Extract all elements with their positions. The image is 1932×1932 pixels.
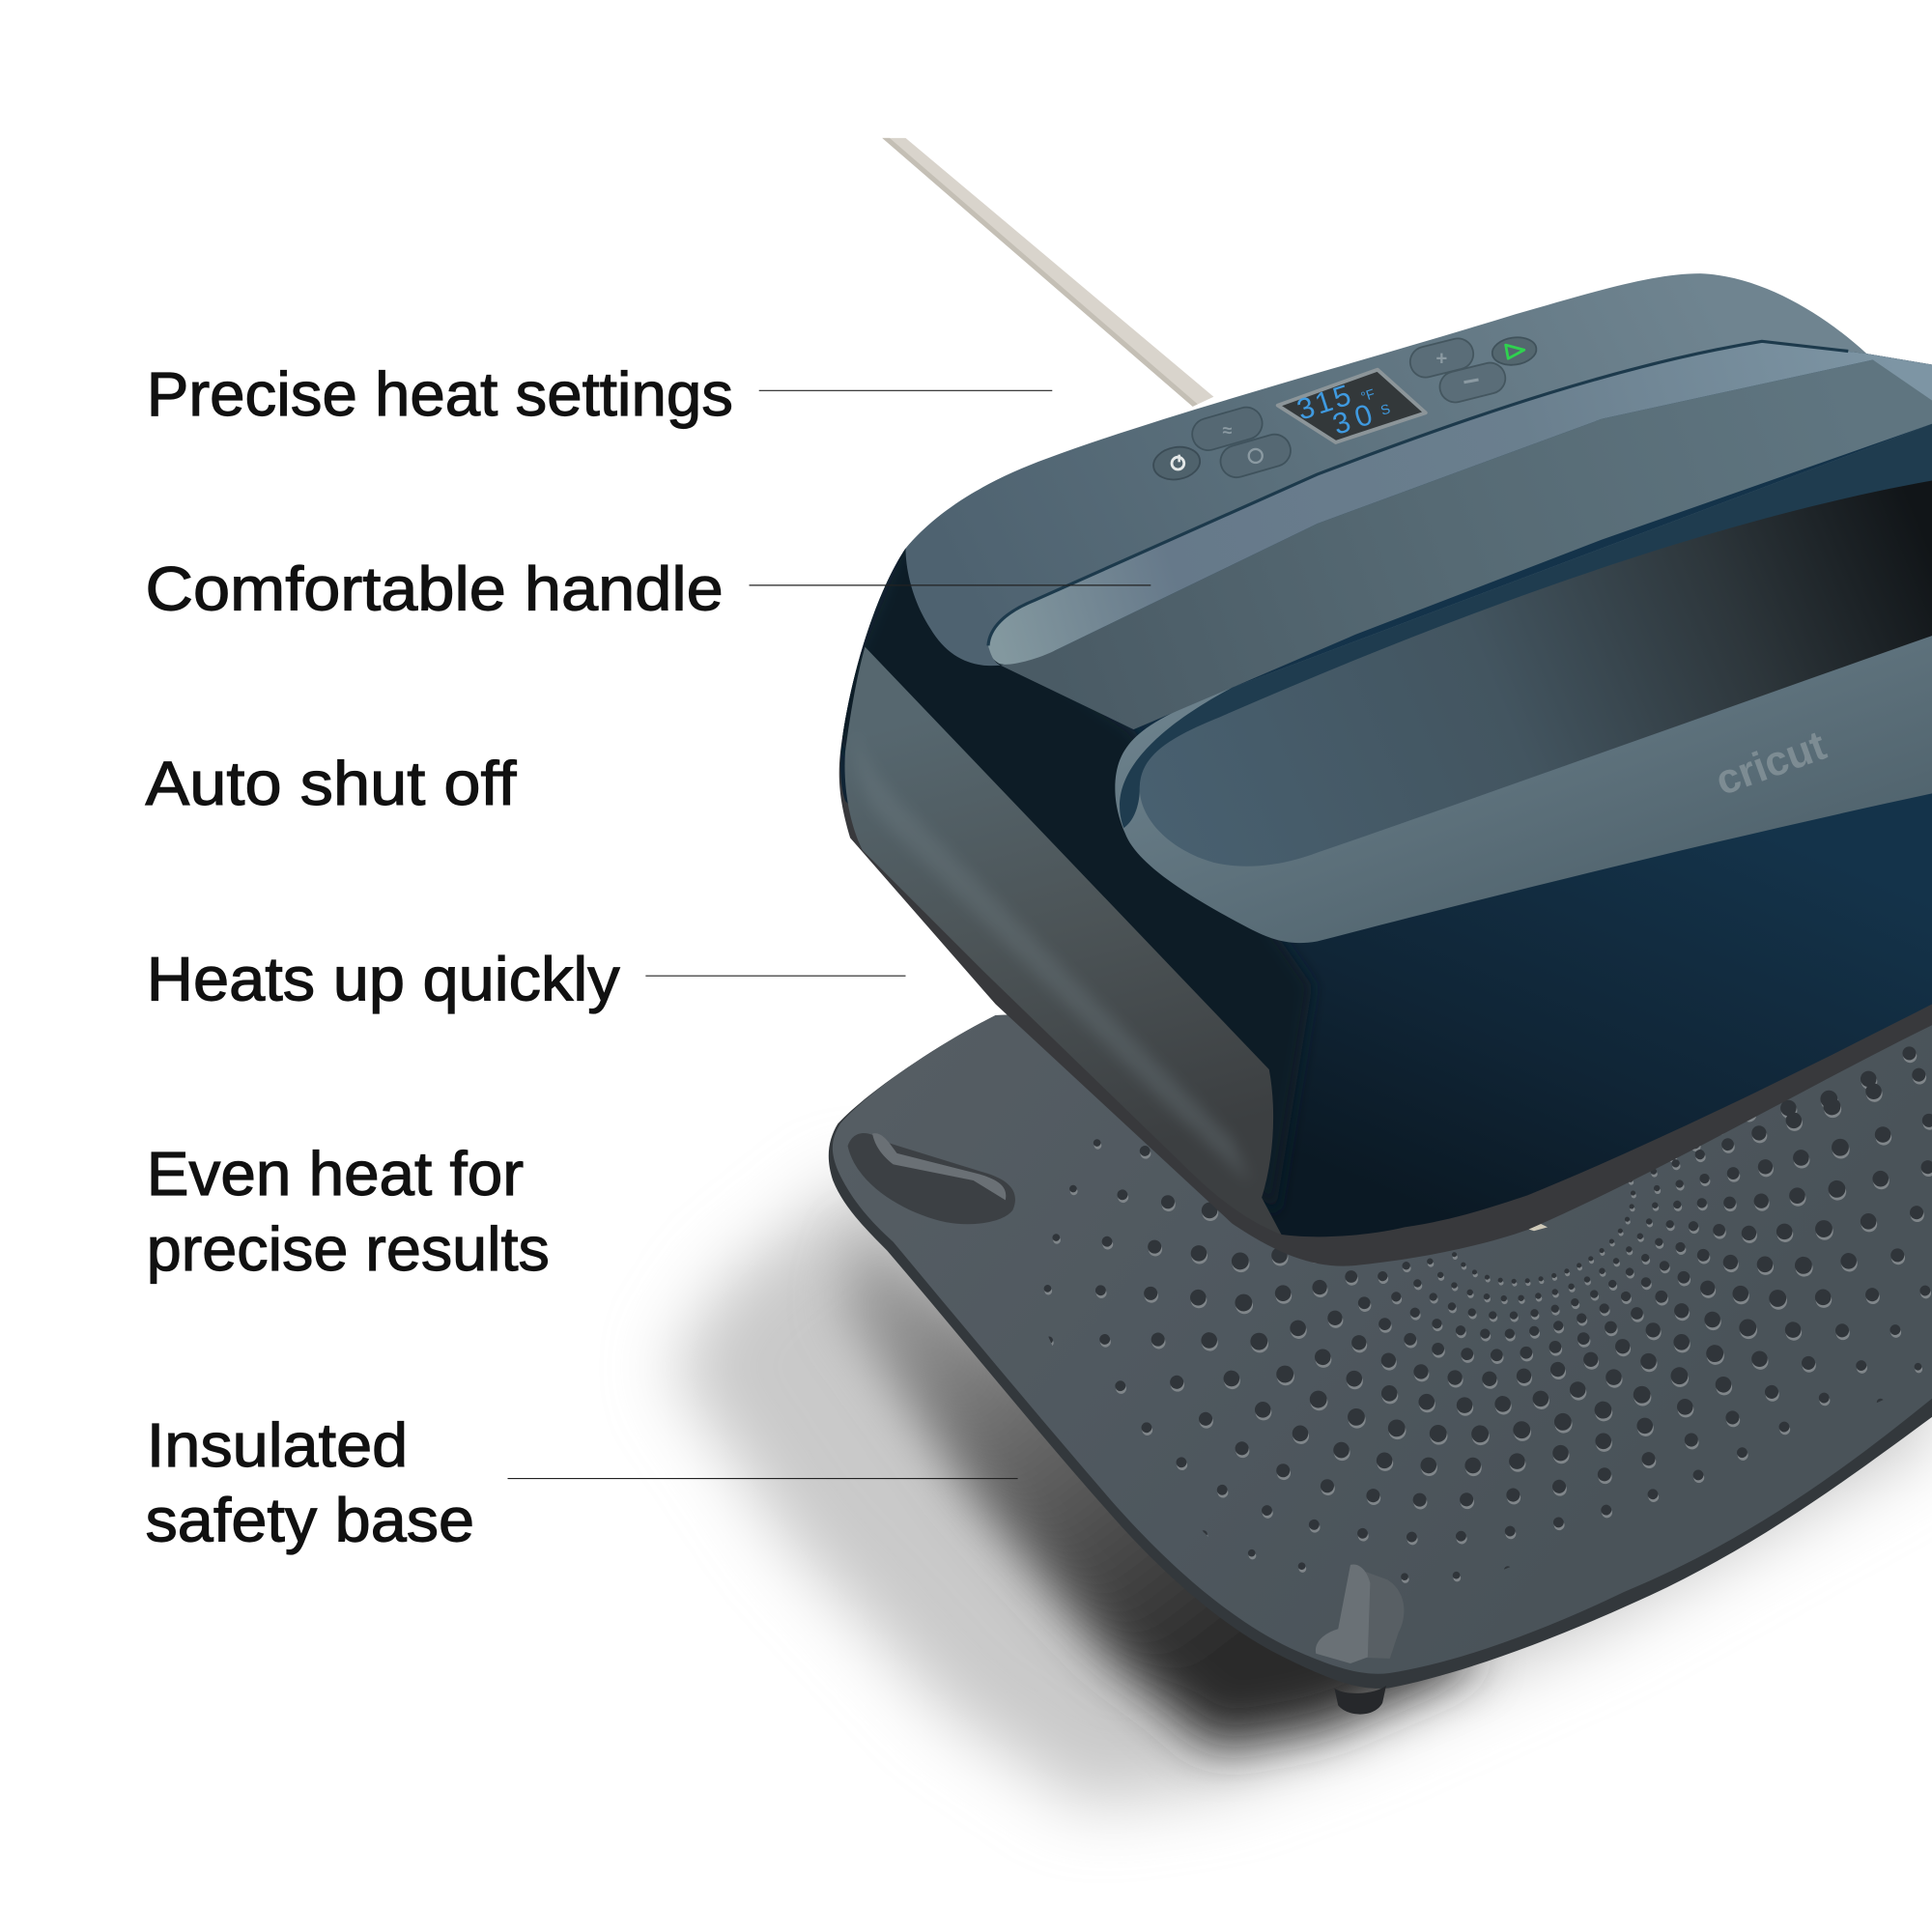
button: power [1151, 443, 1203, 483]
digital display: 30 [1329, 398, 1377, 441]
handle grip recess [1140, 480, 1932, 867]
button: plus [1406, 335, 1477, 381]
comfortable handle [988, 341, 1932, 943]
label: Even heat for precise results [147, 1139, 550, 1284]
digital display: 315 [1293, 379, 1354, 427]
handle lower face [1115, 424, 1932, 943]
label: Insulated safety base [146, 1410, 1018, 1555]
side window panel [845, 647, 1282, 1235]
label: Heats up quickly: Heats up quickly [147, 945, 620, 1014]
rest foot: top left [848, 1133, 1015, 1224]
handle grip rim [1120, 424, 1932, 828]
digital display: °F [1359, 385, 1377, 405]
button: heat [1188, 404, 1266, 454]
digital display: S [1378, 401, 1392, 418]
handle top face [1001, 359, 1932, 729]
handle light strip [988, 341, 1932, 665]
label: Insulated safety base: Insulated [147, 1410, 408, 1480]
label: Even heat for precise results: Even heat for [147, 1139, 524, 1208]
press lid navy body [840, 321, 1932, 1236]
upper left dark corner [841, 549, 1310, 1049]
button: minus [1436, 359, 1509, 406]
logo mark on base [1520, 1204, 1550, 1231]
power cord [882, 138, 1213, 407]
handle groove line [988, 341, 1848, 645]
label: Insulated safety base: safety base [146, 1486, 474, 1555]
button: timer [1217, 431, 1294, 481]
rest foot: bottom right [1316, 1565, 1404, 1715]
button: start with green indicator [1491, 334, 1538, 368]
label: Auto shut off: Auto shut off [146, 749, 517, 818]
press lid outer lip [839, 321, 1932, 1266]
label: Even heat for precise results: precise results [147, 1214, 550, 1284]
product illustration: heat press [671, 138, 1932, 1805]
brand name: cricut [1710, 723, 1833, 805]
insulated safety base plate [829, 1014, 1932, 1689]
button: plus: + [1435, 349, 1447, 370]
perforated heat-vent holes [1043, 1047, 1932, 1583]
cast shadow under base [671, 1182, 1932, 1805]
label: Comfortable handle: Comfortable handle [146, 554, 724, 623]
button: heat: ≈ [1223, 421, 1233, 440]
label: Precise heat settings: Precise heat settings [147, 359, 733, 429]
top control panel [906, 273, 1866, 666]
digital display [1278, 370, 1426, 442]
